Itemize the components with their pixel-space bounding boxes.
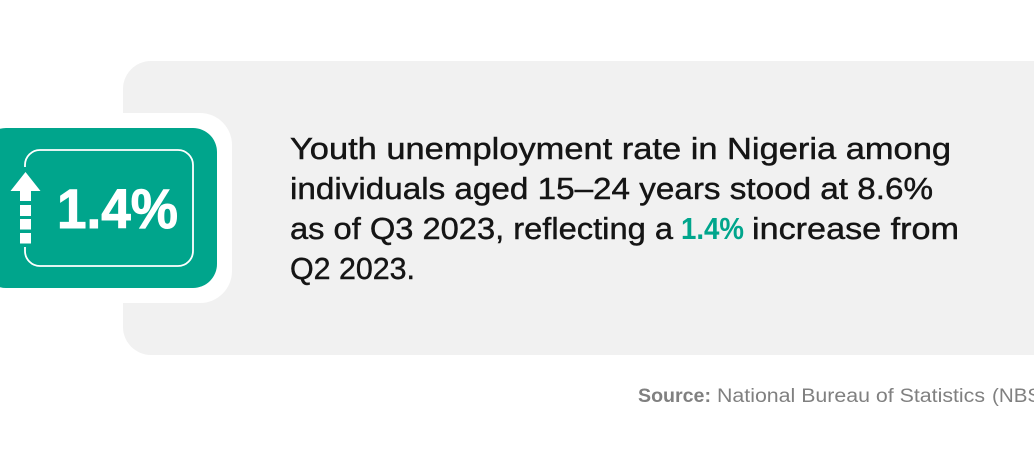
text block: main statement: Youth unemployment rate in Nigeria among (290, 131, 951, 166)
text block: main statement: individuals aged 15–24 years stood at 8.6% (290, 171, 933, 206)
text block: main statement: Q2 2023. (290, 251, 415, 286)
source note: Source: (638, 386, 711, 407)
panel: white frame behind badge (0, 113, 232, 303)
text block: main statement: increase from (752, 211, 959, 246)
icon: dashed up arrow (10, 172, 40, 244)
badge inner outline (25, 150, 193, 266)
source note (638, 386, 1034, 407)
source note: National Bureau of Statistics (717, 386, 985, 407)
text block: main statement: 1.4% (681, 211, 744, 246)
text block: main statement (290, 131, 959, 286)
badge value: 1.4% (57, 177, 178, 240)
text block: main statement: as of Q3 2023, reflecting a (290, 211, 674, 246)
panel: grey background card (123, 61, 1034, 355)
panel: teal badge (0, 128, 217, 288)
